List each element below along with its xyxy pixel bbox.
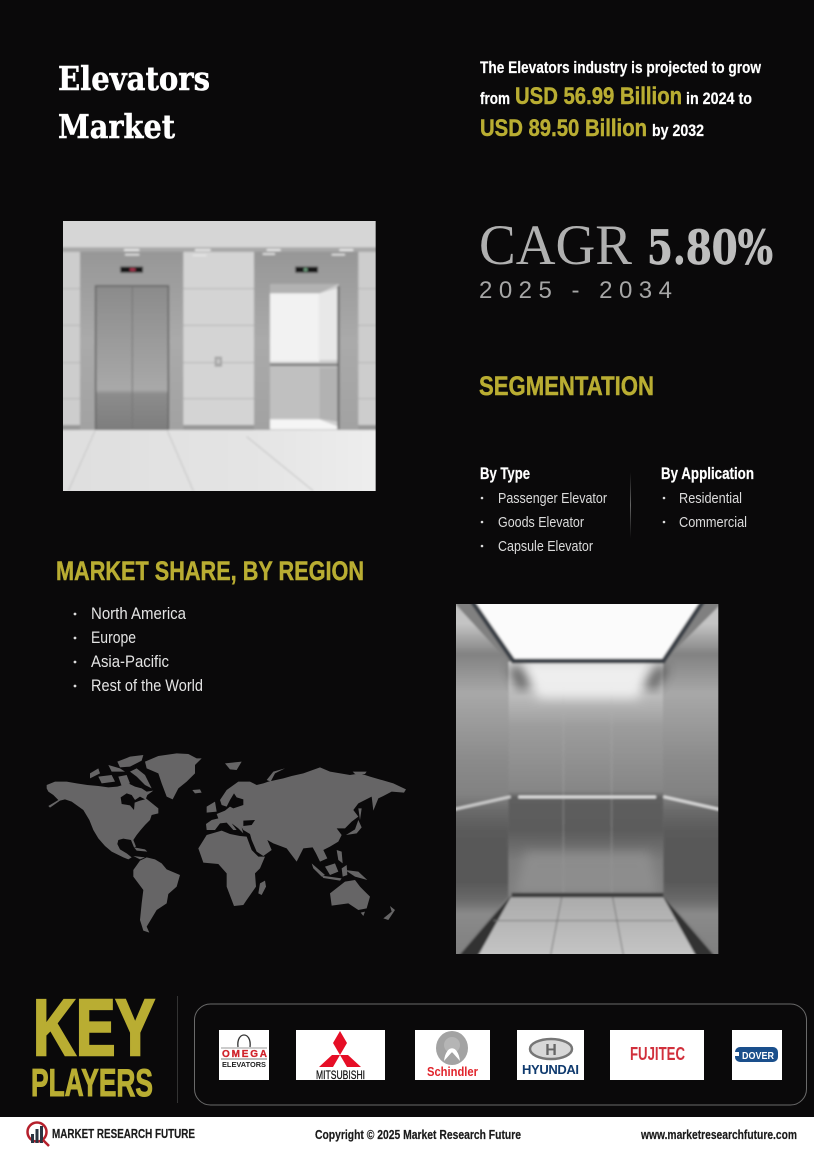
photo: elevator interior <box>450 598 727 962</box>
segmentation: by type: Capsule Elevator <box>498 538 593 555</box>
footer copyright: Copyright © 2025 Market Research Future <box>315 1127 521 1142</box>
heading: market share by region: MARKET SHARE, BY REGION <box>56 556 364 586</box>
region list: Asia-Pacific <box>91 652 169 671</box>
logo: Hyundai: HYUNDAI <box>522 1062 579 1077</box>
title: Elevators <box>58 59 210 98</box>
segmentation: by application: Commercial <box>679 514 747 531</box>
logo: Omega Elevators: OMEGA <box>222 1049 267 1060</box>
market size text block: USD 56.99 Billion <box>515 83 682 110</box>
market size text block <box>480 59 761 142</box>
heading: key players: PLAYERS <box>31 1062 153 1105</box>
market size text block: from <box>480 90 510 108</box>
market size text block: The Elevators industry is projected to grow <box>480 59 761 77</box>
logo: Hyundai: H <box>545 1042 557 1059</box>
heading: key players <box>31 983 155 1105</box>
logo: Dover <box>732 1030 782 1080</box>
key players panel <box>194 1004 806 1105</box>
segmentation: by type: By Type <box>480 465 530 483</box>
heading: key players: KEY <box>33 983 155 1072</box>
segmentation: by application: By Application <box>661 465 754 483</box>
title: Market <box>58 107 176 146</box>
CAGR: CAGR <box>479 214 632 277</box>
region list <box>74 604 203 695</box>
CAGR: 2025 - 2034 <box>479 277 672 304</box>
heading: segmentation: SEGMENTATION <box>479 371 654 401</box>
segmentation: by type <box>480 465 607 555</box>
footer brand: MARKET RESEARCH FUTURE <box>52 1126 195 1141</box>
market size text block: in 2024 to <box>686 90 752 108</box>
market size text block: by 2032 <box>652 122 704 140</box>
world map <box>47 753 406 933</box>
logo: Dover: DOVER <box>742 1050 774 1062</box>
CAGR: 5.80% <box>647 221 773 276</box>
logo: Mitsubishi: MITSUBISHI <box>316 1068 365 1082</box>
CAGR <box>479 214 773 304</box>
region list: Rest of the World <box>91 676 203 695</box>
segmentation: by type: Passenger Elevator <box>498 490 607 507</box>
icon: market research future logo <box>28 1122 49 1146</box>
footer <box>0 1117 814 1150</box>
segmentation: by type: Goods Elevator <box>498 514 584 531</box>
logo: Schindler <box>415 1030 490 1080</box>
segmentation: by application: Residential <box>679 490 742 507</box>
region list: Europe <box>91 628 136 647</box>
logo: Hyundai <box>517 1030 584 1080</box>
logo: Mitsubishi <box>296 1030 385 1082</box>
title <box>58 59 210 146</box>
market size text block: USD 89.50 Billion <box>480 115 647 142</box>
region list: North America <box>91 604 186 623</box>
logo: Fujitec <box>610 1030 704 1080</box>
photo: elevator lobby <box>57 215 383 497</box>
logo: Fujitec: FUJITEC <box>630 1044 685 1064</box>
segmentation: by application <box>661 465 754 531</box>
logo: Schindler: Schindler <box>427 1064 478 1079</box>
logo: Omega Elevators <box>219 1030 269 1080</box>
logo: Omega Elevators: ELEVATORS <box>222 1062 266 1069</box>
